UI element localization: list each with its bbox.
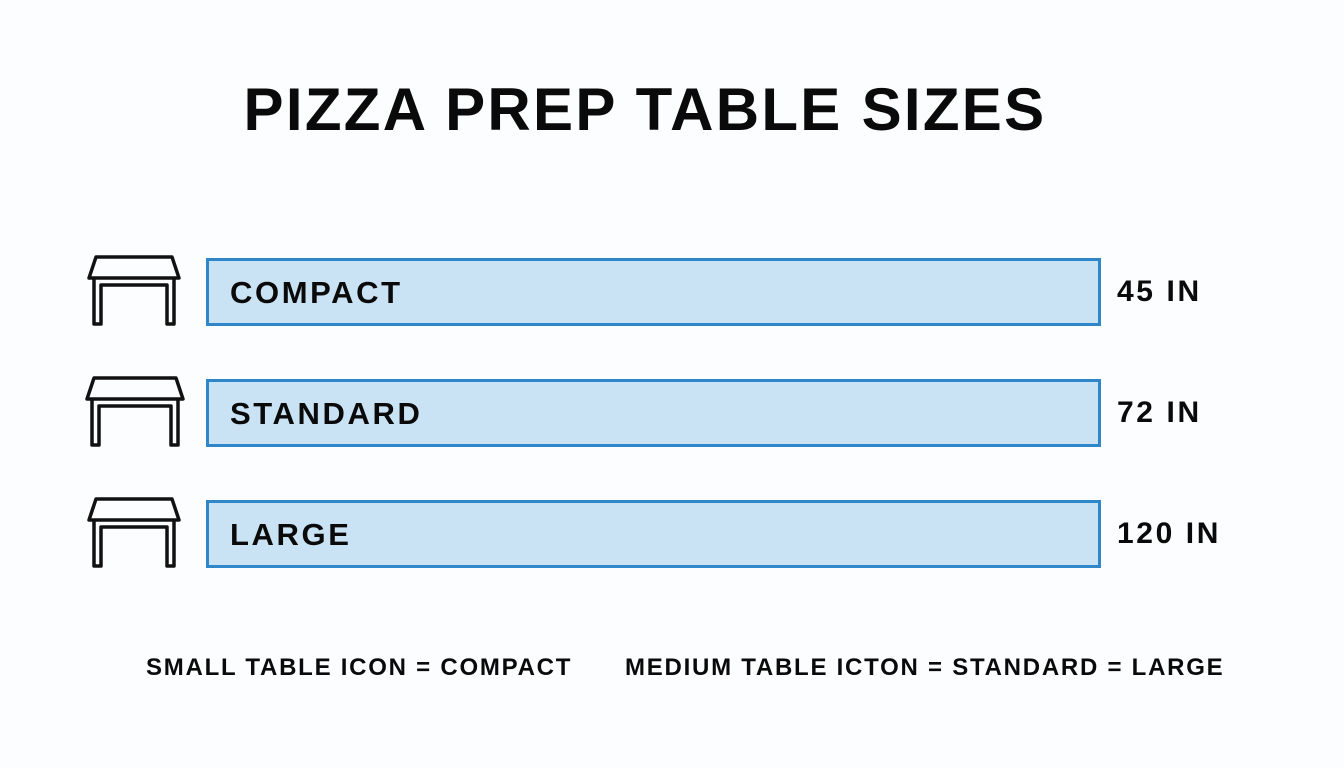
bar: standard [206, 379, 1101, 447]
icon: table standard [85, 376, 185, 447]
legend: compact: SMALL TABLE ICON = COMPACT [146, 654, 572, 681]
title: PIZZA PREP TABLE SIZES [244, 76, 1046, 143]
icon: table large [87, 497, 181, 568]
icon: table compact [87, 255, 181, 326]
bar: large [206, 500, 1101, 568]
value: large: 120 IN [1117, 517, 1221, 550]
value: standard: 72 IN [1117, 396, 1202, 429]
legend: standard/large: MEDIUM TABLE ICTON = STANDARD = LARGE [625, 654, 1224, 681]
bar: compact: COMPACT [230, 275, 403, 310]
bar: large: LARGE [230, 517, 352, 552]
value: compact: 45 IN [1117, 275, 1202, 308]
bar: compact [206, 258, 1101, 326]
bar: standard: STANDARD [230, 396, 422, 431]
